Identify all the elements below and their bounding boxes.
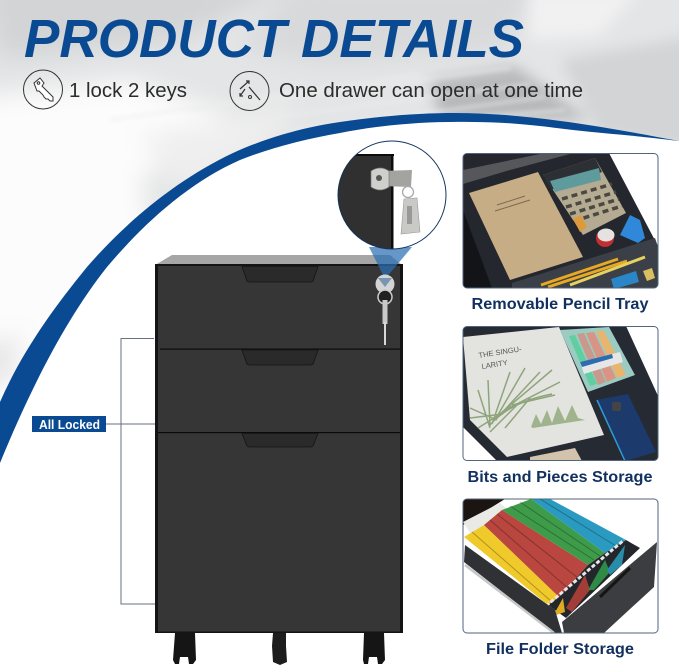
storage photo bbox=[463, 326, 659, 462]
magnifier detail bbox=[335, 141, 446, 250]
lock on cabinet with key bbox=[376, 274, 394, 345]
caster left bbox=[173, 633, 196, 664]
folder edge lines bbox=[472, 499, 616, 602]
All Locked tag bbox=[32, 416, 106, 432]
caption: Removable Pencil Tray bbox=[472, 296, 649, 313]
panel border bbox=[463, 499, 658, 633]
caption: File Folder Storage bbox=[486, 641, 634, 658]
panel: bits and pieces storage bbox=[463, 326, 659, 486]
icon: drawer arrows bbox=[230, 72, 269, 110]
cabinet top bbox=[155, 255, 402, 265]
panel: file folder storage bbox=[463, 499, 659, 658]
cabinet body bbox=[155, 264, 403, 633]
palm bbox=[470, 368, 560, 432]
storage photo: LARITY bbox=[481, 358, 508, 371]
black door panel bbox=[338, 156, 391, 248]
hanging key bbox=[402, 186, 414, 198]
drawer handle 2 bbox=[242, 350, 318, 365]
drawer photo bbox=[463, 499, 659, 634]
feature: 1 lock 2 keys bbox=[24, 70, 187, 109]
lock bracket and label bbox=[32, 338, 155, 604]
tag text: All Locked bbox=[39, 418, 100, 432]
magnifier beam bbox=[369, 247, 412, 279]
drawer handle 1 bbox=[242, 266, 318, 282]
panel border bbox=[463, 154, 658, 288]
blurred grey background bbox=[0, 0, 679, 420]
bracket lines bbox=[106, 338, 155, 604]
top drawer seam bbox=[160, 348, 400, 350]
key in lock bbox=[389, 170, 412, 187]
title: PRODUCT DETAILS bbox=[24, 9, 524, 69]
label: One drawer can open at one time bbox=[279, 79, 583, 102]
feature: one drawer can open at one time bbox=[230, 72, 583, 110]
panel border bbox=[463, 326, 658, 460]
tray photo bbox=[463, 153, 659, 289]
drawer handle 3 bbox=[242, 434, 318, 447]
storage photo: THE SINGU- bbox=[478, 344, 523, 360]
lower drawer seam bbox=[158, 432, 400, 433]
blue curved band bbox=[0, 113, 679, 463]
caption: Bits and Pieces Storage bbox=[468, 469, 653, 486]
filing cabinet bbox=[155, 255, 403, 665]
label: 1 lock 2 keys bbox=[69, 80, 187, 102]
caster right bbox=[363, 633, 385, 664]
icon: key bbox=[24, 70, 62, 109]
caster middle bbox=[272, 633, 287, 665]
panel: removable pencil tray bbox=[463, 153, 659, 313]
